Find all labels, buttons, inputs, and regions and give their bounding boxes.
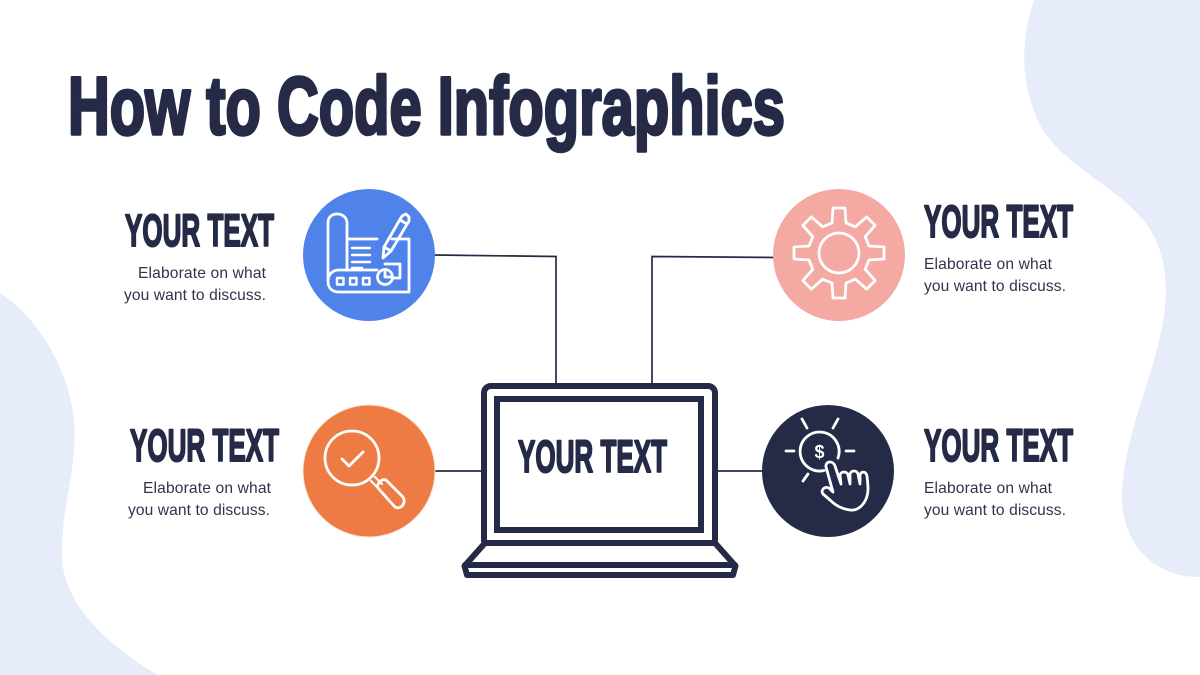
laptop base — [464, 543, 736, 575]
icon: gear in pink circle — [773, 189, 905, 321]
laptop lid outline — [484, 386, 715, 541]
heading: top right: YOUR TEXT — [924, 196, 1073, 247]
body text: bottom right: Elaborate on what — [924, 480, 1053, 497]
body text: top left: Elaborate on what — [138, 265, 267, 282]
body text: top left: you want to discuss. — [124, 287, 266, 304]
block: top left heading and text — [124, 205, 274, 304]
icon: hand clicking coin in navy circle — [762, 405, 894, 537]
laptop screen — [497, 399, 701, 530]
background blob: top right — [1024, 0, 1200, 577]
background blob: bottom left — [0, 293, 158, 675]
icon: magnifier in orange circle — [303, 405, 435, 537]
connector lines — [434, 255, 775, 471]
body text: bottom left — [128, 480, 272, 519]
laptop screen text: YOUR TEXT — [518, 431, 667, 482]
dollar sign: $ — [814, 442, 825, 462]
laptop illustration — [464, 386, 736, 575]
heading: bottom right: YOUR TEXT — [924, 420, 1073, 471]
heading: bottom left: YOUR TEXT — [130, 420, 279, 471]
body text: top left — [124, 265, 267, 304]
body text: bottom right — [924, 480, 1066, 519]
body text: top right: Elaborate on what — [924, 256, 1053, 273]
title: How to Code Infographics — [68, 61, 785, 152]
body text: bottom right: you want to discuss. — [924, 502, 1066, 519]
body text: bottom left: Elaborate on what — [143, 480, 272, 497]
block: top right heading and text — [924, 196, 1073, 295]
body text: bottom left: you want to discuss. — [128, 502, 270, 519]
block: bottom right heading and text — [924, 420, 1073, 519]
heading: top left: YOUR TEXT — [125, 205, 274, 256]
body text: top right — [924, 256, 1066, 295]
block: bottom left heading and text — [128, 420, 279, 519]
body text: top right: you want to discuss. — [924, 278, 1066, 295]
icon: blueprint in blue circle — [303, 189, 435, 321]
